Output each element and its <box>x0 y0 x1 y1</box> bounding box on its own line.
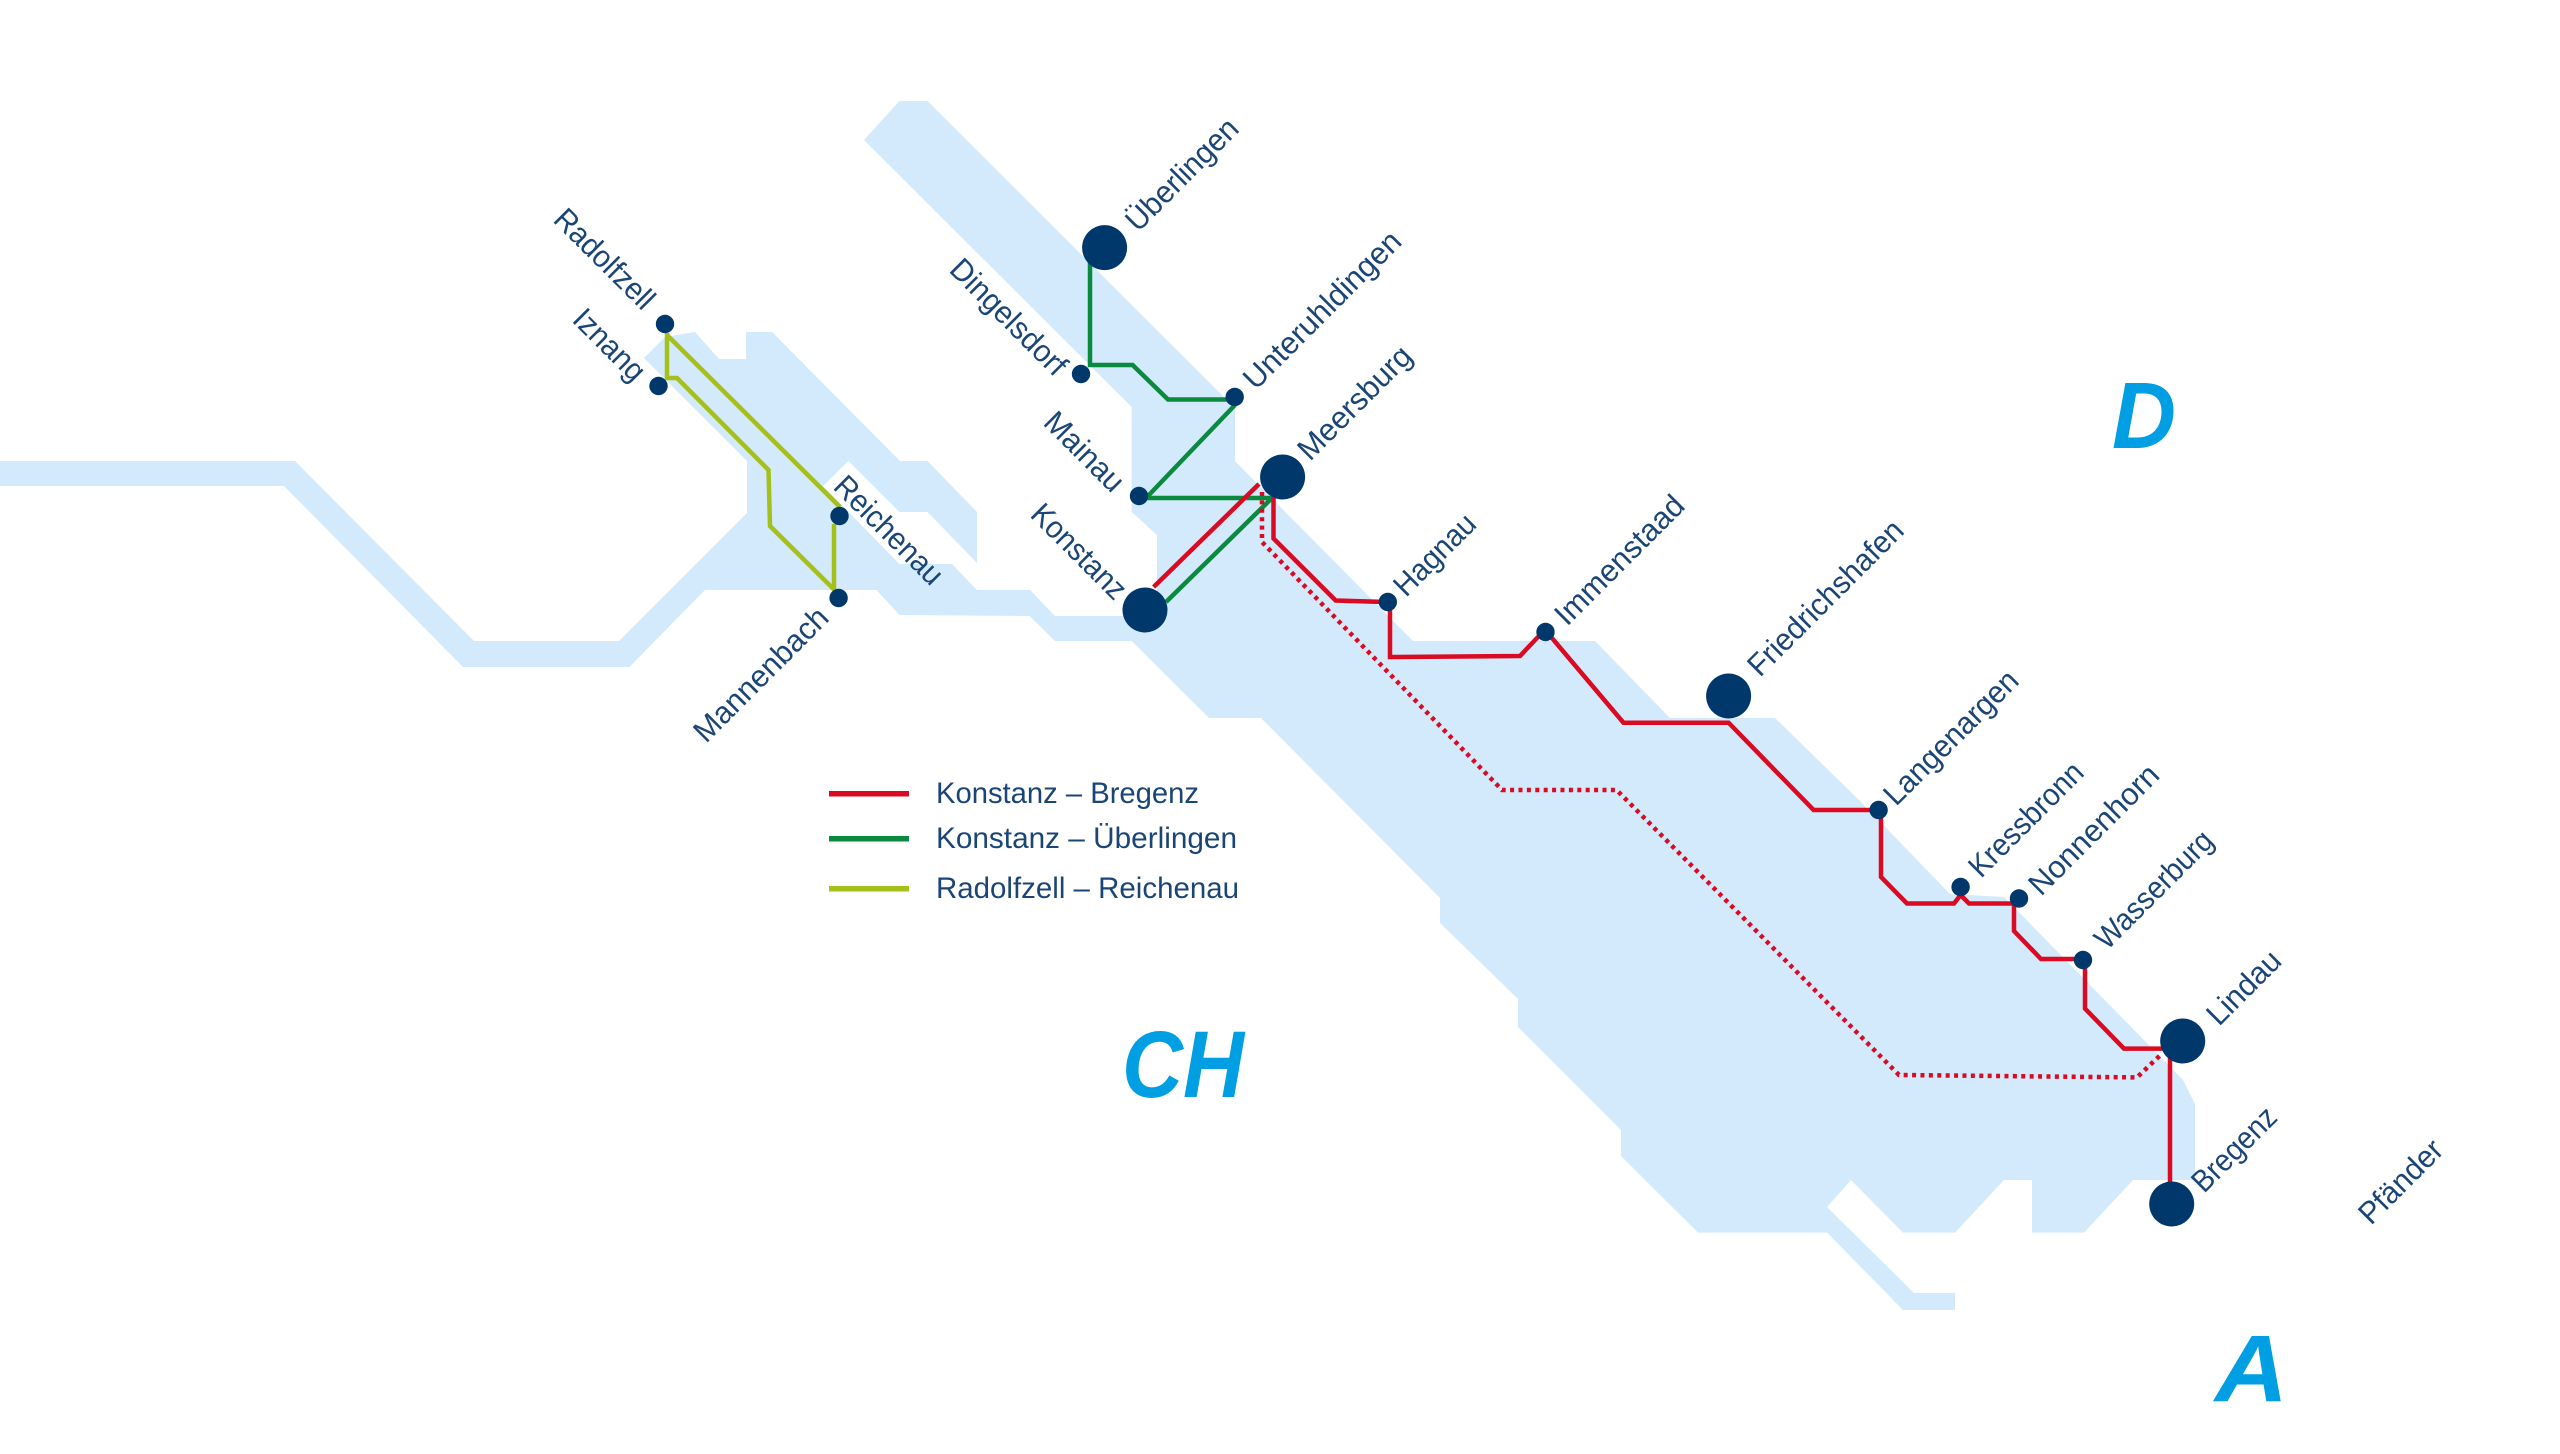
label: Iznang: Iznang <box>566 301 653 388</box>
label: Bregenz: Bregenz <box>2184 1099 2284 1199</box>
station labels <box>547 111 2450 1231</box>
major stops <box>1082 225 2205 1227</box>
legend row: Radolfzell – Reichenau: Radolfzell – Reichenau <box>936 872 1239 905</box>
country label: A: A <box>2213 1316 2288 1422</box>
label: Friedrichshafen: Friedrichshafen <box>1740 513 1911 683</box>
legend row: Konstanz – Überlingen: Konstanz – Überlingen <box>936 822 1237 855</box>
legend <box>829 777 1239 905</box>
label: Hagnau: Hagnau <box>1386 506 1483 603</box>
label: Langenargen: Langenargen <box>1876 663 2025 812</box>
legend row: Konstanz – Bregenz: Konstanz – Bregenz <box>936 777 1199 810</box>
label: Überlingen: Überlingen <box>1118 111 1245 238</box>
label: Mainau: Mainau <box>1037 404 1132 499</box>
label: Konstanz: Konstanz <box>1024 496 1134 607</box>
label: Mannenbach: Mannenbach <box>686 600 835 749</box>
label: Unteruhldingen: Unteruhldingen <box>1236 223 1408 396</box>
label: Wasserburg: Wasserburg <box>2087 823 2220 956</box>
label: Nonnenhorn: Nonnenhorn <box>2021 757 2166 902</box>
label: Meersburg: Meersburg <box>1290 338 1419 467</box>
label: Immenstaad: Immenstaad <box>1547 488 1691 632</box>
lake and rivers <box>0 101 2195 1310</box>
label: Dingelsdorf: Dingelsdorf <box>943 251 1075 383</box>
route: Konstanz – Bregenz dotted express <box>1262 492 2161 1077</box>
route: Konstanz – Überlingen <box>1090 255 1272 602</box>
label: Radolfzell: Radolfzell <box>547 201 662 316</box>
legend row: Konstanz – Bregenz <box>829 777 1199 810</box>
country label: D: D <box>2112 363 2176 469</box>
label: Lindau: Lindau <box>2199 943 2288 1032</box>
label: Kressbronn: Kressbronn <box>1961 755 2091 884</box>
minor stops <box>649 315 2092 969</box>
label: Reichenau: Reichenau <box>827 468 951 592</box>
route: Konstanz – Bregenz <box>1154 484 2170 1190</box>
route: Radolfzell – Reichenau <box>667 333 840 590</box>
country label: CH: CH <box>1122 1012 1246 1118</box>
label: Pfänder: Pfänder <box>2351 1132 2450 1231</box>
